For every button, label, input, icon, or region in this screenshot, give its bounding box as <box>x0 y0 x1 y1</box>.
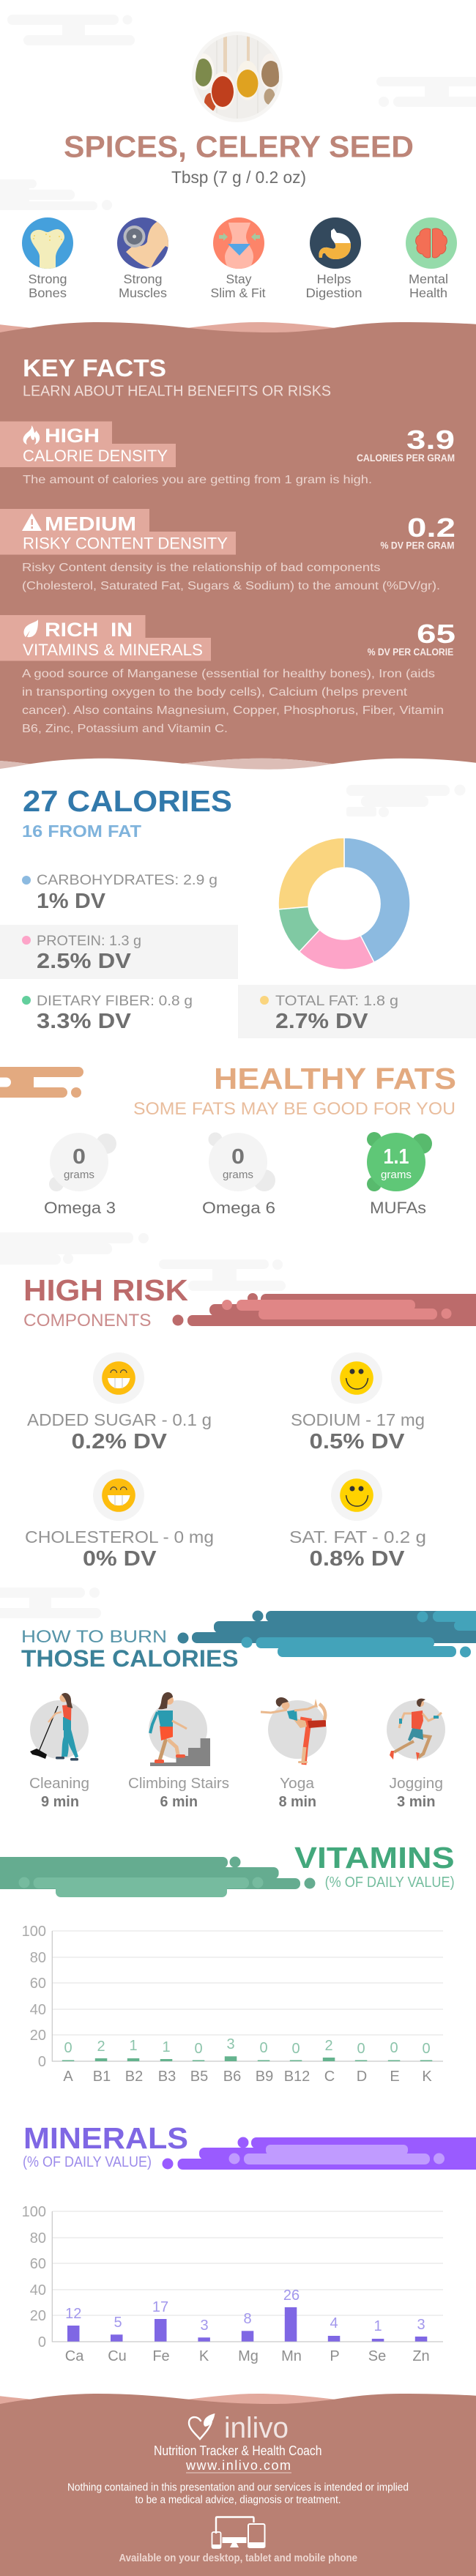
label: digestion: Digestion <box>306 286 362 300</box>
activity: jogging <box>387 1699 445 1761</box>
chart: minerals bar chart: 100 <box>22 2204 46 2220</box>
value: 6 min: 6 min <box>160 1794 198 1810</box>
fat: omega 3: 0 <box>72 1145 86 1169</box>
chart: vitamins bar chart: 0 <box>64 2040 72 2056</box>
subheading: SOME FATS MAY BE GOOD FOR YOU <box>133 1099 455 1119</box>
icon: devices <box>212 2517 265 2548</box>
value label: high: HIGH <box>45 425 100 447</box>
label: calorie density: CALORIE DENSITY <box>23 447 168 465</box>
logo: inlivo: inlivo <box>224 2412 289 2444</box>
chart: minerals bar chart: 20 <box>30 2308 46 2324</box>
chart: minerals bar chart: 26 <box>283 2287 300 2304</box>
activity: cleaning <box>30 1693 89 1760</box>
metric unit: % DV PER CALORIE <box>368 647 453 658</box>
banner: healthy fats <box>0 1067 83 1098</box>
subheading: LEARN ABOUT HEALTH BENEFITS OR RISKS <box>23 382 331 400</box>
website: www.inlivo.com <box>185 2458 291 2473</box>
chart: minerals bar chart: Mn <box>281 2348 302 2364</box>
fat: omega 6: grams <box>223 1169 253 1181</box>
icon: mental health <box>406 217 457 269</box>
chart: vitamins bar chart: 0 <box>291 2041 300 2057</box>
icon: stay slim and fit <box>213 217 264 269</box>
label: helps: Helps <box>316 272 352 286</box>
icon: grinning face <box>93 1352 144 1404</box>
chart: vitamins bar chart: 0 <box>357 2041 365 2057</box>
chart: minerals bar chart: 40 <box>30 2282 46 2298</box>
activity: climbing stairs <box>149 1692 210 1766</box>
label: strong: Strong <box>123 272 163 286</box>
description: rich in line 2: in transporting oxygen to the body cells), Calcium (helps prevent <box>22 686 408 699</box>
chart: minerals bar chart: 80 <box>30 2230 46 2246</box>
label: yoga: Yoga <box>280 1776 315 1792</box>
label: CHOLESTEROL - 0 mg <box>25 1527 214 1546</box>
fat: omega 6 <box>202 1132 275 1217</box>
disclaimer line 2: to be a medical advice, diagnosis or treatment. <box>135 2495 341 2506</box>
chart: vitamins bar chart: A <box>63 2069 73 2085</box>
chart: vitamins bar chart: 1 <box>162 2039 171 2055</box>
icon: strong bones <box>22 217 73 271</box>
title: SPICES, CELERY SEED <box>64 129 414 164</box>
metric: 65: 65 <box>417 619 455 649</box>
legend: total fat: TOTAL FAT: 1.8 g <box>275 994 398 1009</box>
legend: dietary fiber: 3.3% DV <box>37 1010 132 1033</box>
legend: protein: PROTEIN: 1.3 g <box>37 934 141 949</box>
fat: omega 3: Omega 3 <box>44 1199 116 1217</box>
chart: minerals bar chart: 5 <box>114 2315 122 2331</box>
icon: smiling face <box>331 1352 382 1404</box>
chart: minerals bar chart: 3 <box>200 2318 209 2334</box>
chart: vitamins bar chart: 0 <box>390 2040 398 2056</box>
chart: vitamins bar chart: 20 <box>30 2028 46 2044</box>
description: calorie density: The amount of calories you are getting from 1 gram is high. <box>23 474 372 486</box>
label: stay: Stay <box>226 272 252 286</box>
fat: mufas: MUFAs <box>370 1199 426 1217</box>
chart: minerals bar chart: 1 <box>373 2318 382 2334</box>
banner: burn calories <box>177 1611 476 1658</box>
heading: those calories: THOSE CALORIES <box>21 1645 239 1672</box>
chart: vitamins bar chart: 40 <box>30 2002 46 2018</box>
chart: vitamins bar chart <box>22 1924 443 2085</box>
chart: vitamins bar chart: 0 <box>259 2040 268 2056</box>
disclaimer line 1: Nothing contained in this presentation and our services is intended or implied <box>67 2482 409 2494</box>
chart: vitamins bar chart: 80 <box>30 1950 46 1966</box>
description: risky content line 1: Risky Content density is the relationship of bad components <box>22 562 381 574</box>
chart: vitamins bar chart: 0 <box>194 2041 203 2057</box>
value: 0% DV <box>83 1547 157 1571</box>
serving size: Tbsp (7 g / 0.2 oz) <box>171 168 306 187</box>
value: 9 min: 9 min <box>41 1794 79 1810</box>
metric: 3.9: 3.9 <box>406 425 455 455</box>
chart: minerals bar chart: Mg <box>238 2348 259 2364</box>
label: bones: Bones <box>29 286 67 300</box>
label: ADDED SUGAR - 0.1 g <box>27 1410 212 1429</box>
chart: calorie donut <box>278 838 410 969</box>
label: strong bones: Strong <box>28 272 67 286</box>
label: jogging: Jogging <box>390 1776 443 1792</box>
heading: how to burn: HOW TO BURN <box>21 1627 167 1647</box>
heading: key facts: KEY FACTS <box>23 354 166 381</box>
legend: total fat <box>238 985 476 1038</box>
component: sodium <box>291 1352 425 1453</box>
photo: spices on spoons <box>192 31 283 122</box>
description: risky content line 2: (Cholesterol, Saturated Fat, Sugars & Sodium) to the amount (%DV/gr). <box>22 580 440 592</box>
panel: footer <box>0 2394 476 2576</box>
chart: vitamins bar chart: 2 <box>324 2038 333 2054</box>
chart: vitamins bar chart: B3 <box>158 2069 176 2085</box>
value label: rich in: RICH IN <box>45 619 133 641</box>
legend: carbohydrates: 1% DV <box>37 890 106 913</box>
chart: vitamins bar chart: B5 <box>190 2069 208 2085</box>
tagline: Nutrition Tracker & Health Coach <box>154 2443 322 2458</box>
chart: vitamins bar chart: 60 <box>30 1976 46 1992</box>
fat: omega 6: 0 <box>231 1145 245 1169</box>
chart: minerals bar chart: P <box>330 2348 340 2364</box>
value: 0.5% DV <box>309 1430 405 1453</box>
chart: minerals bar chart <box>22 2204 443 2364</box>
label: SODIUM - 17 mg <box>291 1410 425 1429</box>
chart: minerals bar chart: Zn <box>412 2348 430 2364</box>
chart: vitamins bar chart: 1 <box>129 2038 138 2054</box>
banner: minerals <box>163 2137 476 2170</box>
chart: vitamins bar chart: C <box>324 2069 335 2085</box>
badge: high calorie density <box>0 422 176 467</box>
icon: warning <box>22 513 42 531</box>
heading: healthy fats: HEALTHY FATS <box>214 1062 456 1095</box>
label: SAT. FAT - 0.2 g <box>289 1527 426 1546</box>
label: cleaning: Cleaning <box>29 1776 89 1792</box>
legend: protein <box>0 925 238 979</box>
chart: vitamins bar chart: K <box>422 2069 432 2085</box>
description: rich in line 4: B6, Zinc, Potassium and Vitamin C. <box>22 723 228 735</box>
banner: high risk <box>173 1293 476 1326</box>
label: health: Health <box>409 286 447 300</box>
chart: minerals bar chart: Cu <box>108 2348 127 2364</box>
chart: minerals bar chart: 3 <box>417 2317 425 2333</box>
availability note: Available on your desktop, tablet and mobile phone <box>119 2552 357 2564</box>
value: 8 min: 8 min <box>279 1794 316 1810</box>
value label: medium: MEDIUM <box>45 513 136 535</box>
fat: mufas <box>367 1132 432 1217</box>
chart: vitamins bar chart: 2 <box>97 2039 105 2055</box>
label: climbing stairs: Climbing Stairs <box>128 1776 229 1792</box>
value: 0.8% DV <box>309 1547 405 1571</box>
chart: minerals bar chart: Ca <box>65 2348 84 2364</box>
legend: dietary fiber <box>22 994 193 1033</box>
subheading: components: COMPONENTS <box>23 1311 151 1330</box>
chart: vitamins bar chart: B6 <box>223 2069 241 2085</box>
chart: vitamins bar chart: B9 <box>256 2069 273 2085</box>
fat: mufas: 1.1 <box>384 1145 409 1169</box>
icon: helps digestion <box>310 217 361 269</box>
description: rich in line 1: A good source of Manganese (essential for healthy bones), Iron (aids <box>22 668 435 680</box>
icon: strong muscles <box>117 217 171 269</box>
chart: vitamins bar chart: E <box>390 2069 400 2085</box>
chart: vitamins bar chart: 100 <box>22 1924 46 1940</box>
chart: minerals bar chart: 8 <box>243 2311 252 2327</box>
label: risky content density: RISKY CONTENT DENSITY <box>23 535 228 552</box>
legend: dietary fiber: DIETARY FIBER: 0.8 g <box>37 994 193 1009</box>
legend: carbohydrates <box>22 873 217 913</box>
fat: omega 6: Omega 6 <box>202 1199 275 1217</box>
icon: smiling face <box>331 1470 382 1521</box>
banner: vitamins <box>0 1857 315 1897</box>
legend: protein: 2.5% DV <box>37 950 132 973</box>
subheading: 16 from fat: 16 FROM FAT <box>22 822 141 841</box>
fat: omega 3 <box>44 1133 116 1217</box>
icon: flame <box>23 425 40 444</box>
chart: minerals bar chart: K <box>199 2348 209 2364</box>
metric unit: % DV PER GRAM <box>381 540 454 551</box>
badge: rich in vitamins and minerals <box>0 615 211 660</box>
legend: carbohydrates: CARBOHYDRATES: 2.9 g <box>37 873 217 888</box>
fat: omega 3: grams <box>64 1169 94 1181</box>
chart: minerals bar chart: Se <box>368 2348 386 2364</box>
label: vitamins and minerals: VITAMINS & MINERALS <box>23 641 203 659</box>
icon: grinning face <box>93 1470 144 1521</box>
chart: minerals bar chart: 0 <box>38 2334 46 2350</box>
logo: inlivo <box>189 2412 289 2444</box>
panel: key facts <box>0 322 476 770</box>
heading: vitamins: VITAMINS <box>294 1841 455 1875</box>
chart: vitamins bar chart: B1 <box>93 2069 111 2085</box>
label: muscles: Muscles <box>119 286 167 300</box>
heading: high risk: HIGH RISK <box>23 1273 188 1307</box>
component: cholesterol <box>25 1470 214 1571</box>
value: 3 min: 3 min <box>397 1794 435 1810</box>
chart: vitamins bar chart: 0 <box>422 2041 431 2057</box>
metric unit: CALORIES PER GRAM <box>357 453 455 464</box>
chart: vitamins bar chart: D <box>357 2069 367 2085</box>
component: added sugar <box>27 1352 212 1453</box>
heading: minerals: MINERALS <box>23 2121 188 2155</box>
legend: total fat: 2.7% DV <box>275 1010 368 1033</box>
fat: mufas: grams <box>381 1169 412 1181</box>
label: slim and fit: Slim & Fit <box>211 286 266 300</box>
chart: vitamins bar chart: B12 <box>284 2069 310 2085</box>
component: saturated fat <box>289 1470 426 1571</box>
description: rich in line 3: cancer). Also contains Magnesium, Copper, Phosphorus, Fiber, Vitamin <box>22 704 444 717</box>
metric: 0.2: 0.2 <box>407 513 455 543</box>
chart: vitamins bar chart: 0 <box>38 2054 46 2070</box>
chart: minerals bar chart: Fe <box>152 2348 170 2364</box>
subheading: percent daily value: (% OF DAILY VALUE) <box>23 2154 152 2170</box>
value: 0.2% DV <box>72 1430 168 1453</box>
chart: minerals bar chart: 60 <box>30 2256 46 2272</box>
chart: vitamins bar chart: 3 <box>226 2036 235 2052</box>
label: mental: Mental <box>409 272 448 286</box>
icon: leaf <box>23 619 38 637</box>
chart: vitamins bar chart: B2 <box>125 2069 143 2085</box>
activity: yoga <box>261 1697 327 1765</box>
chart: minerals bar chart: 17 <box>152 2299 168 2315</box>
chart: minerals bar chart: 12 <box>65 2306 81 2322</box>
badge: medium risky content density <box>0 509 236 555</box>
heading: 27 calories: 27 CALORIES <box>23 784 232 818</box>
subheading: percent daily value: (% OF DAILY VALUE) <box>325 1875 455 1891</box>
chart: minerals bar chart: 4 <box>330 2315 338 2331</box>
